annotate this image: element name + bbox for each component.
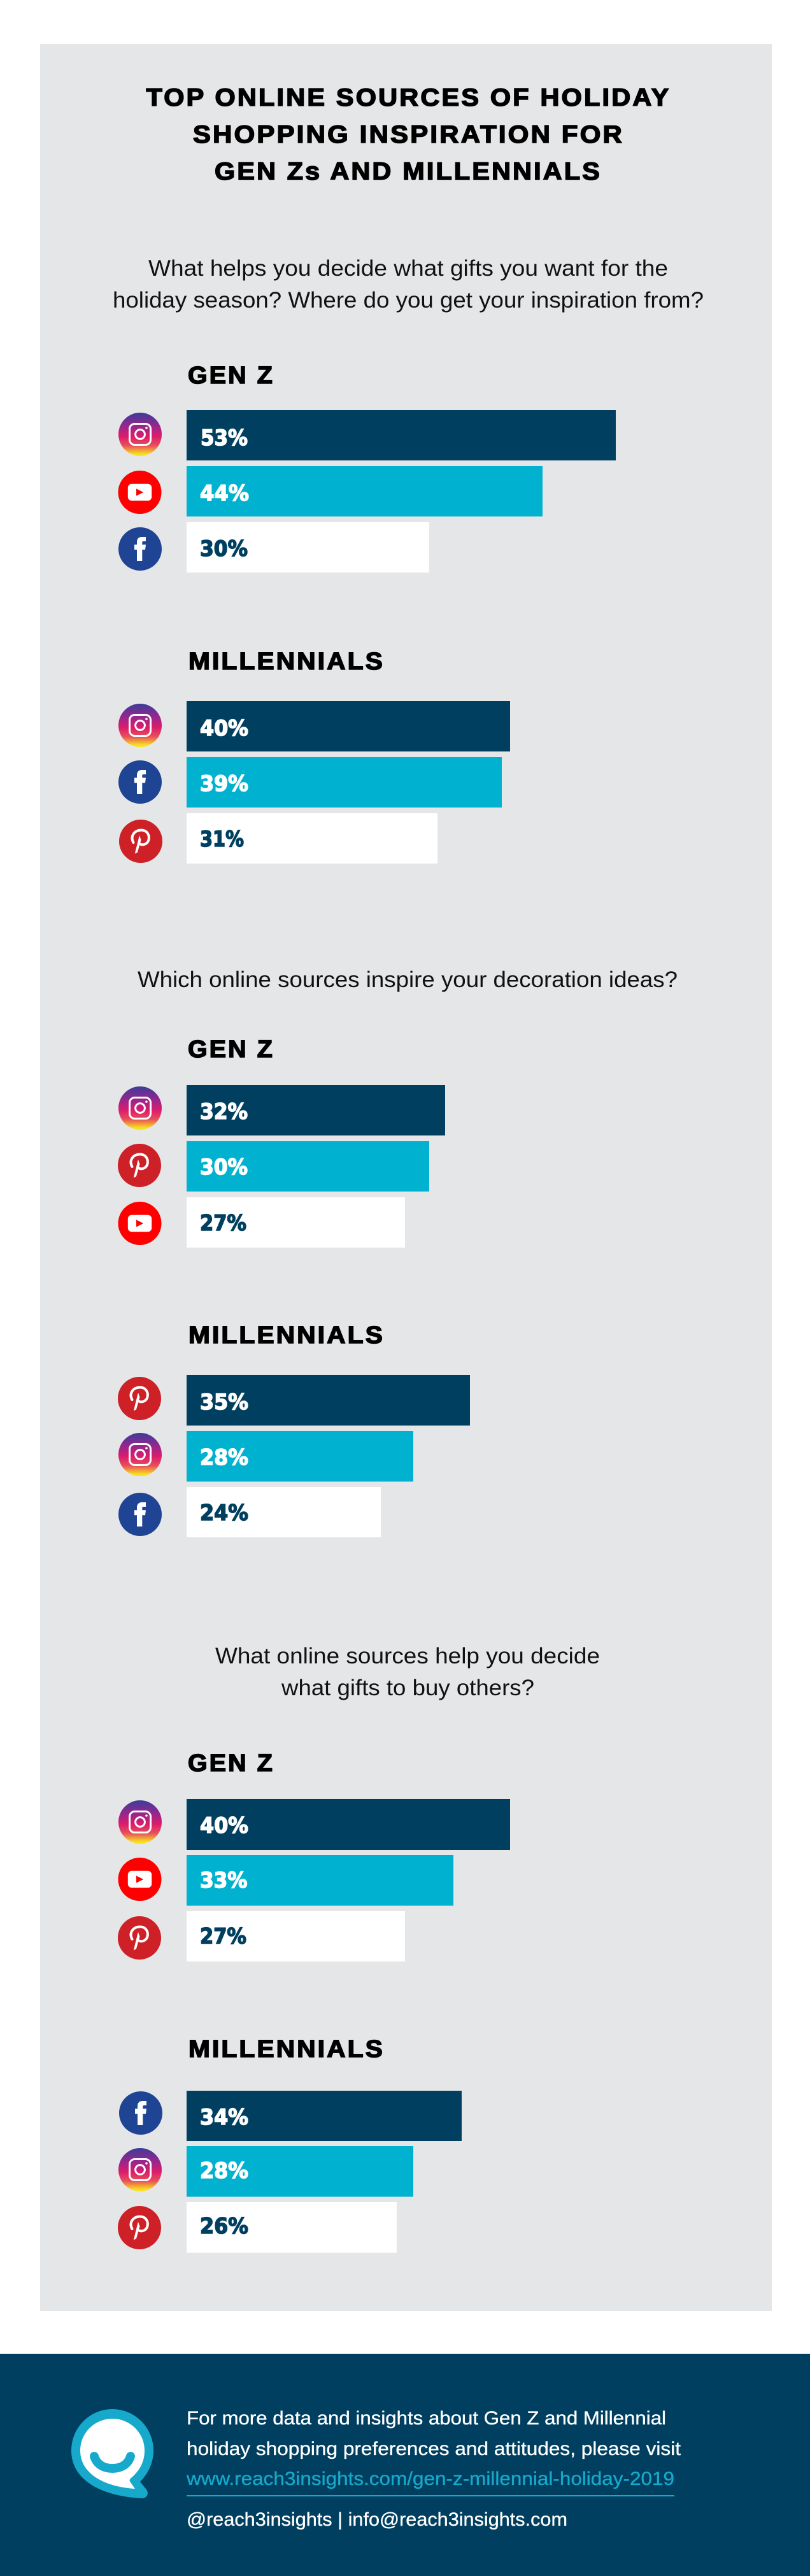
row: YouTube 44%: 44% <box>200 481 249 506</box>
row: Pinterest 31%: 31% <box>200 827 244 852</box>
row: YouTube 44% <box>118 466 543 516</box>
row: Instagram 53% <box>118 410 616 460</box>
title: GEN Zs AND MILLENNIALS <box>215 158 602 185</box>
bar chart: Gen Z decoration ideas <box>118 1085 445 1248</box>
heading: Gen Z wants: GEN Z <box>188 362 274 389</box>
row: Instagram 32% <box>118 1085 445 1135</box>
row: Pinterest 26% <box>118 2202 397 2253</box>
question 3: What online sources help you decide <box>215 1644 600 1669</box>
row: Pinterest 27% <box>118 1911 405 1961</box>
title <box>146 84 671 185</box>
row: Instagram 40%: 40% <box>200 1813 248 1839</box>
row: Facebook 24%: 24% <box>200 1500 248 1526</box>
bar chart: Millennials gifts for others <box>118 2091 462 2253</box>
row: Instagram 40% <box>118 1799 510 1850</box>
row: Facebook 34% <box>119 2091 462 2141</box>
footer band <box>0 2354 810 2576</box>
row: Pinterest 35%: 35% <box>200 1390 248 1415</box>
row: Instagram 28%: 28% <box>200 2158 248 2184</box>
row: Instagram 40% <box>118 701 510 751</box>
row: Pinterest 27%: 27% <box>200 1924 246 1949</box>
bar chart: Millennials decoration ideas <box>118 1375 470 1537</box>
footer text <box>186 2408 681 2530</box>
footer text: holiday shopping preferences and attitudes, please visit <box>187 2438 681 2459</box>
footer text: For more data and insights about Gen Z and Millennial <box>187 2408 666 2429</box>
row: Facebook 39% <box>118 757 502 808</box>
bar chart: Millennials wish list inspiration <box>118 701 510 864</box>
row: Instagram 28% <box>118 1431 413 1481</box>
footer text: www.reach3insights.com/gen-z-millennial-holiday-2019 <box>186 2468 674 2489</box>
question 3: what gifts to buy others? <box>281 1676 534 1700</box>
row: YouTube 33%: 33% <box>200 1868 247 1893</box>
row: Instagram 28%: 28% <box>200 1445 248 1470</box>
heading: Gen Z decorations: GEN Z <box>188 1036 274 1063</box>
row: Facebook 34%: 34% <box>200 2105 248 2130</box>
row: Pinterest 26%: 26% <box>200 2214 248 2239</box>
row: Pinterest 35% <box>118 1375 470 1425</box>
footer text: @reach3insights | info@reach3insights.com <box>187 2509 567 2530</box>
bar chart: Gen Z wish list inspiration <box>118 410 616 573</box>
heading: Gen Z buying: GEN Z <box>188 1750 274 1777</box>
row: YouTube 27% <box>118 1197 405 1248</box>
title: SHOPPING INSPIRATION FOR <box>193 121 624 148</box>
logo: speech bubble smile <box>71 2409 153 2498</box>
row: Facebook 39%: 39% <box>200 771 248 797</box>
row: Instagram 28% <box>118 2146 413 2197</box>
row: Instagram 40%: 40% <box>200 716 248 741</box>
heading: Millennials buying: MILLENNIALS <box>188 2036 385 2063</box>
question 1: What helps you decide what gifts you want for the <box>148 256 668 281</box>
row: Facebook 24% <box>118 1487 381 1537</box>
question 2: Which online sources inspire your decoration ideas? <box>138 967 678 992</box>
row: Pinterest 30% <box>118 1141 429 1192</box>
bar chart: Gen Z gifts for others <box>118 1799 510 1961</box>
question 3 <box>215 1644 600 1700</box>
row: Facebook 30% <box>118 522 429 573</box>
question 1: holiday season? Where do you get your inspiration from? <box>113 288 704 313</box>
title: TOP ONLINE SOURCES OF HOLIDAY <box>146 84 671 111</box>
row: YouTube 27%: 27% <box>200 1211 246 1236</box>
heading: Millennials decorations: MILLENNIALS <box>188 1322 385 1349</box>
heading: Millennials wants: MILLENNIALS <box>188 648 385 675</box>
row: Instagram 32%: 32% <box>200 1099 248 1125</box>
row: Pinterest 30%: 30% <box>200 1155 248 1180</box>
row: YouTube 33% <box>118 1855 453 1905</box>
panel: grey background <box>40 44 772 2311</box>
row: Facebook 30%: 30% <box>200 536 248 562</box>
row: Instagram 53%: 53% <box>201 425 248 451</box>
question 1 <box>113 256 704 313</box>
row: Pinterest 31% <box>119 813 437 864</box>
